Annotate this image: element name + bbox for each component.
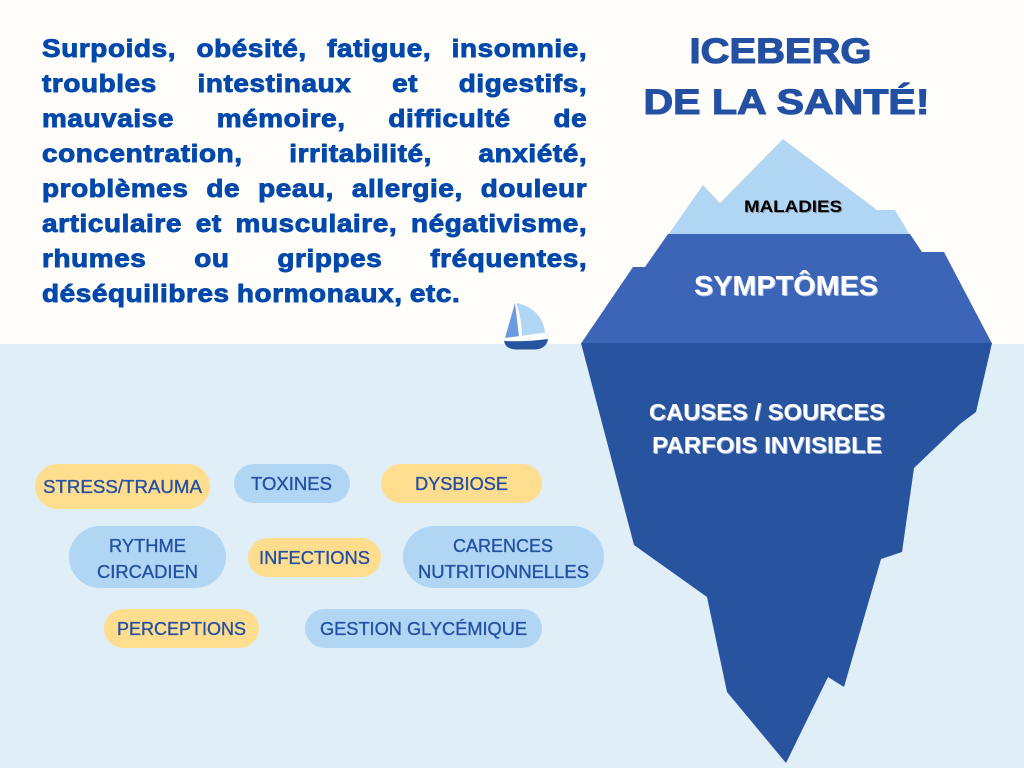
pill: carences nutritionnelles (403, 526, 604, 588)
label: symptômes: SYMPTÔMES (694, 269, 878, 301)
pill: perceptions: PERCEPTIONS (117, 618, 246, 639)
text block: symptom list: Surpoids, obésité, fatigue, insomnie, (42, 35, 587, 63)
iceberg base: causes layer (581, 343, 992, 763)
text block: symptom list (42, 35, 587, 308)
text block: symptom list: rhumes ou grippes fréquentes, (42, 245, 587, 273)
label: maladies: MALADIES (744, 197, 842, 216)
pill: gestion glycémique (305, 609, 542, 648)
text block: symptom list: concentration, irritabilité, anxiété, (42, 140, 587, 168)
text block: symptom list: mauvaise mémoire, difficulté de (42, 105, 587, 133)
pill: infections (248, 538, 381, 577)
pill: carences nutritionnelles: CARENCES (453, 535, 553, 556)
label: causes / sources: PARFOIS INVISIBLE (653, 433, 883, 459)
text block: symptom list: problèmes de peau, allergie, douleur (42, 175, 587, 203)
pill: rythme circadien: CIRCADIEN (97, 561, 198, 582)
label: causes / sources: CAUSES / SOURCES (650, 400, 886, 426)
text block: symptom list: troubles intestinaux et digestifs, (42, 70, 587, 98)
text block: symptom list: articulaire et musculaire, négativisme, (42, 210, 587, 238)
iceberg (581, 139, 992, 763)
text block: symptom list: déséquilibres hormonaux, etc. (42, 280, 460, 308)
iceberg tip: maladies layer (668, 139, 910, 235)
label: symptômes: SYMPTÔMES (695, 270, 879, 302)
pill: perceptions (104, 609, 259, 648)
label: causes / sources: CAUSES / SOURCES (649, 399, 885, 425)
label: causes / sources: PARFOIS INVISIBLE (652, 432, 882, 458)
pill: stress/trauma (35, 464, 210, 509)
icon: sailboat (504, 303, 548, 350)
iceberg middle: symptoms layer (581, 234, 992, 344)
pill: infections: INFECTIONS (259, 547, 370, 568)
title: DE LA SANTÉ! (644, 82, 930, 122)
pills: causes (35, 464, 604, 648)
pill: toxines: TOXINES (251, 473, 332, 494)
pill: dysbiose: DYSBIOSE (415, 473, 508, 494)
pill: rythme circadien: RYTHME (109, 535, 186, 556)
label: maladies: MALADIES (745, 198, 843, 217)
pill: toxines (234, 464, 350, 503)
pill: stress/trauma: STRESS/TRAUMA (43, 476, 203, 497)
title (644, 32, 930, 122)
title: ICEBERG (690, 32, 872, 71)
pill: dysbiose (381, 464, 542, 503)
background: sea (0, 344, 1024, 768)
pill: carences nutritionnelles: NUTRITIONNELLES (418, 561, 589, 582)
pill: rythme circadien (69, 526, 226, 588)
pill: gestion glycémique: GESTION GLYCÉMIQUE (320, 618, 527, 639)
label: causes / sources (649, 399, 886, 459)
